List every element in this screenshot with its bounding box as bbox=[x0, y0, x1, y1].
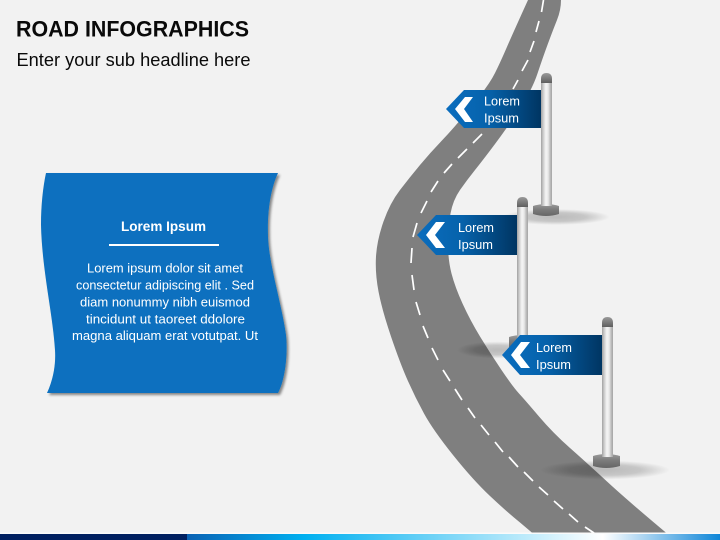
panel heading: Lorem Ipsum bbox=[121, 218, 206, 234]
pole 1 shaft bbox=[541, 83, 552, 206]
road centre line bbox=[411, 0, 594, 533]
shadow: pole 3 base bbox=[540, 460, 670, 480]
sign 3 label: Lorem bbox=[536, 340, 572, 355]
chevron 2 bbox=[426, 222, 445, 248]
panel body text: Lorem ipsum dolor sit amet bbox=[87, 260, 243, 276]
shadow: pole 2 base bbox=[457, 342, 537, 358]
road bbox=[376, 0, 667, 534]
pole 3 cap bbox=[602, 317, 613, 327]
sign 2 label: Lorem bbox=[458, 220, 494, 235]
sign 2 bbox=[417, 215, 517, 255]
pole 3 shaft bbox=[602, 327, 613, 457]
panel body text: magna aliquam erat votutpat. Ut bbox=[72, 328, 258, 343]
sign 3 bbox=[502, 335, 602, 375]
title: ROAD INFOGRAPHICS bbox=[16, 16, 249, 42]
pole 1 cap bbox=[541, 73, 552, 83]
pole 1 base bbox=[533, 204, 559, 216]
pole 2 shaft bbox=[517, 207, 528, 339]
chevron 3 bbox=[511, 342, 530, 368]
sign 1 label: Lorem bbox=[484, 94, 520, 108]
sign 1 bbox=[446, 90, 541, 128]
shadow: pole 1 base bbox=[502, 209, 610, 225]
pole 3 base bbox=[593, 454, 620, 468]
panel body text: diam nonummy nibh euismod bbox=[80, 294, 250, 310]
pole 2 bbox=[509, 197, 535, 349]
pole 1 bbox=[533, 73, 559, 216]
pole 3 bbox=[593, 317, 620, 468]
panel: text card bbox=[41, 173, 287, 393]
sign 2: Ipsum bbox=[458, 237, 493, 252]
sign 3: Ipsum bbox=[536, 357, 571, 372]
panel body text: consectetur adipiscing elit . Sed bbox=[76, 278, 254, 292]
chevron 1 bbox=[455, 97, 473, 122]
pole 2 base bbox=[509, 335, 535, 349]
footer bar bbox=[0, 532, 720, 540]
panel body text: tincidunt ut taoreet ddolore bbox=[86, 312, 245, 326]
subtitle: Enter your sub headline here bbox=[16, 50, 250, 70]
sign 1: Ipsum bbox=[484, 110, 519, 126]
panel body text bbox=[72, 260, 258, 343]
pole 2 cap bbox=[517, 197, 528, 207]
